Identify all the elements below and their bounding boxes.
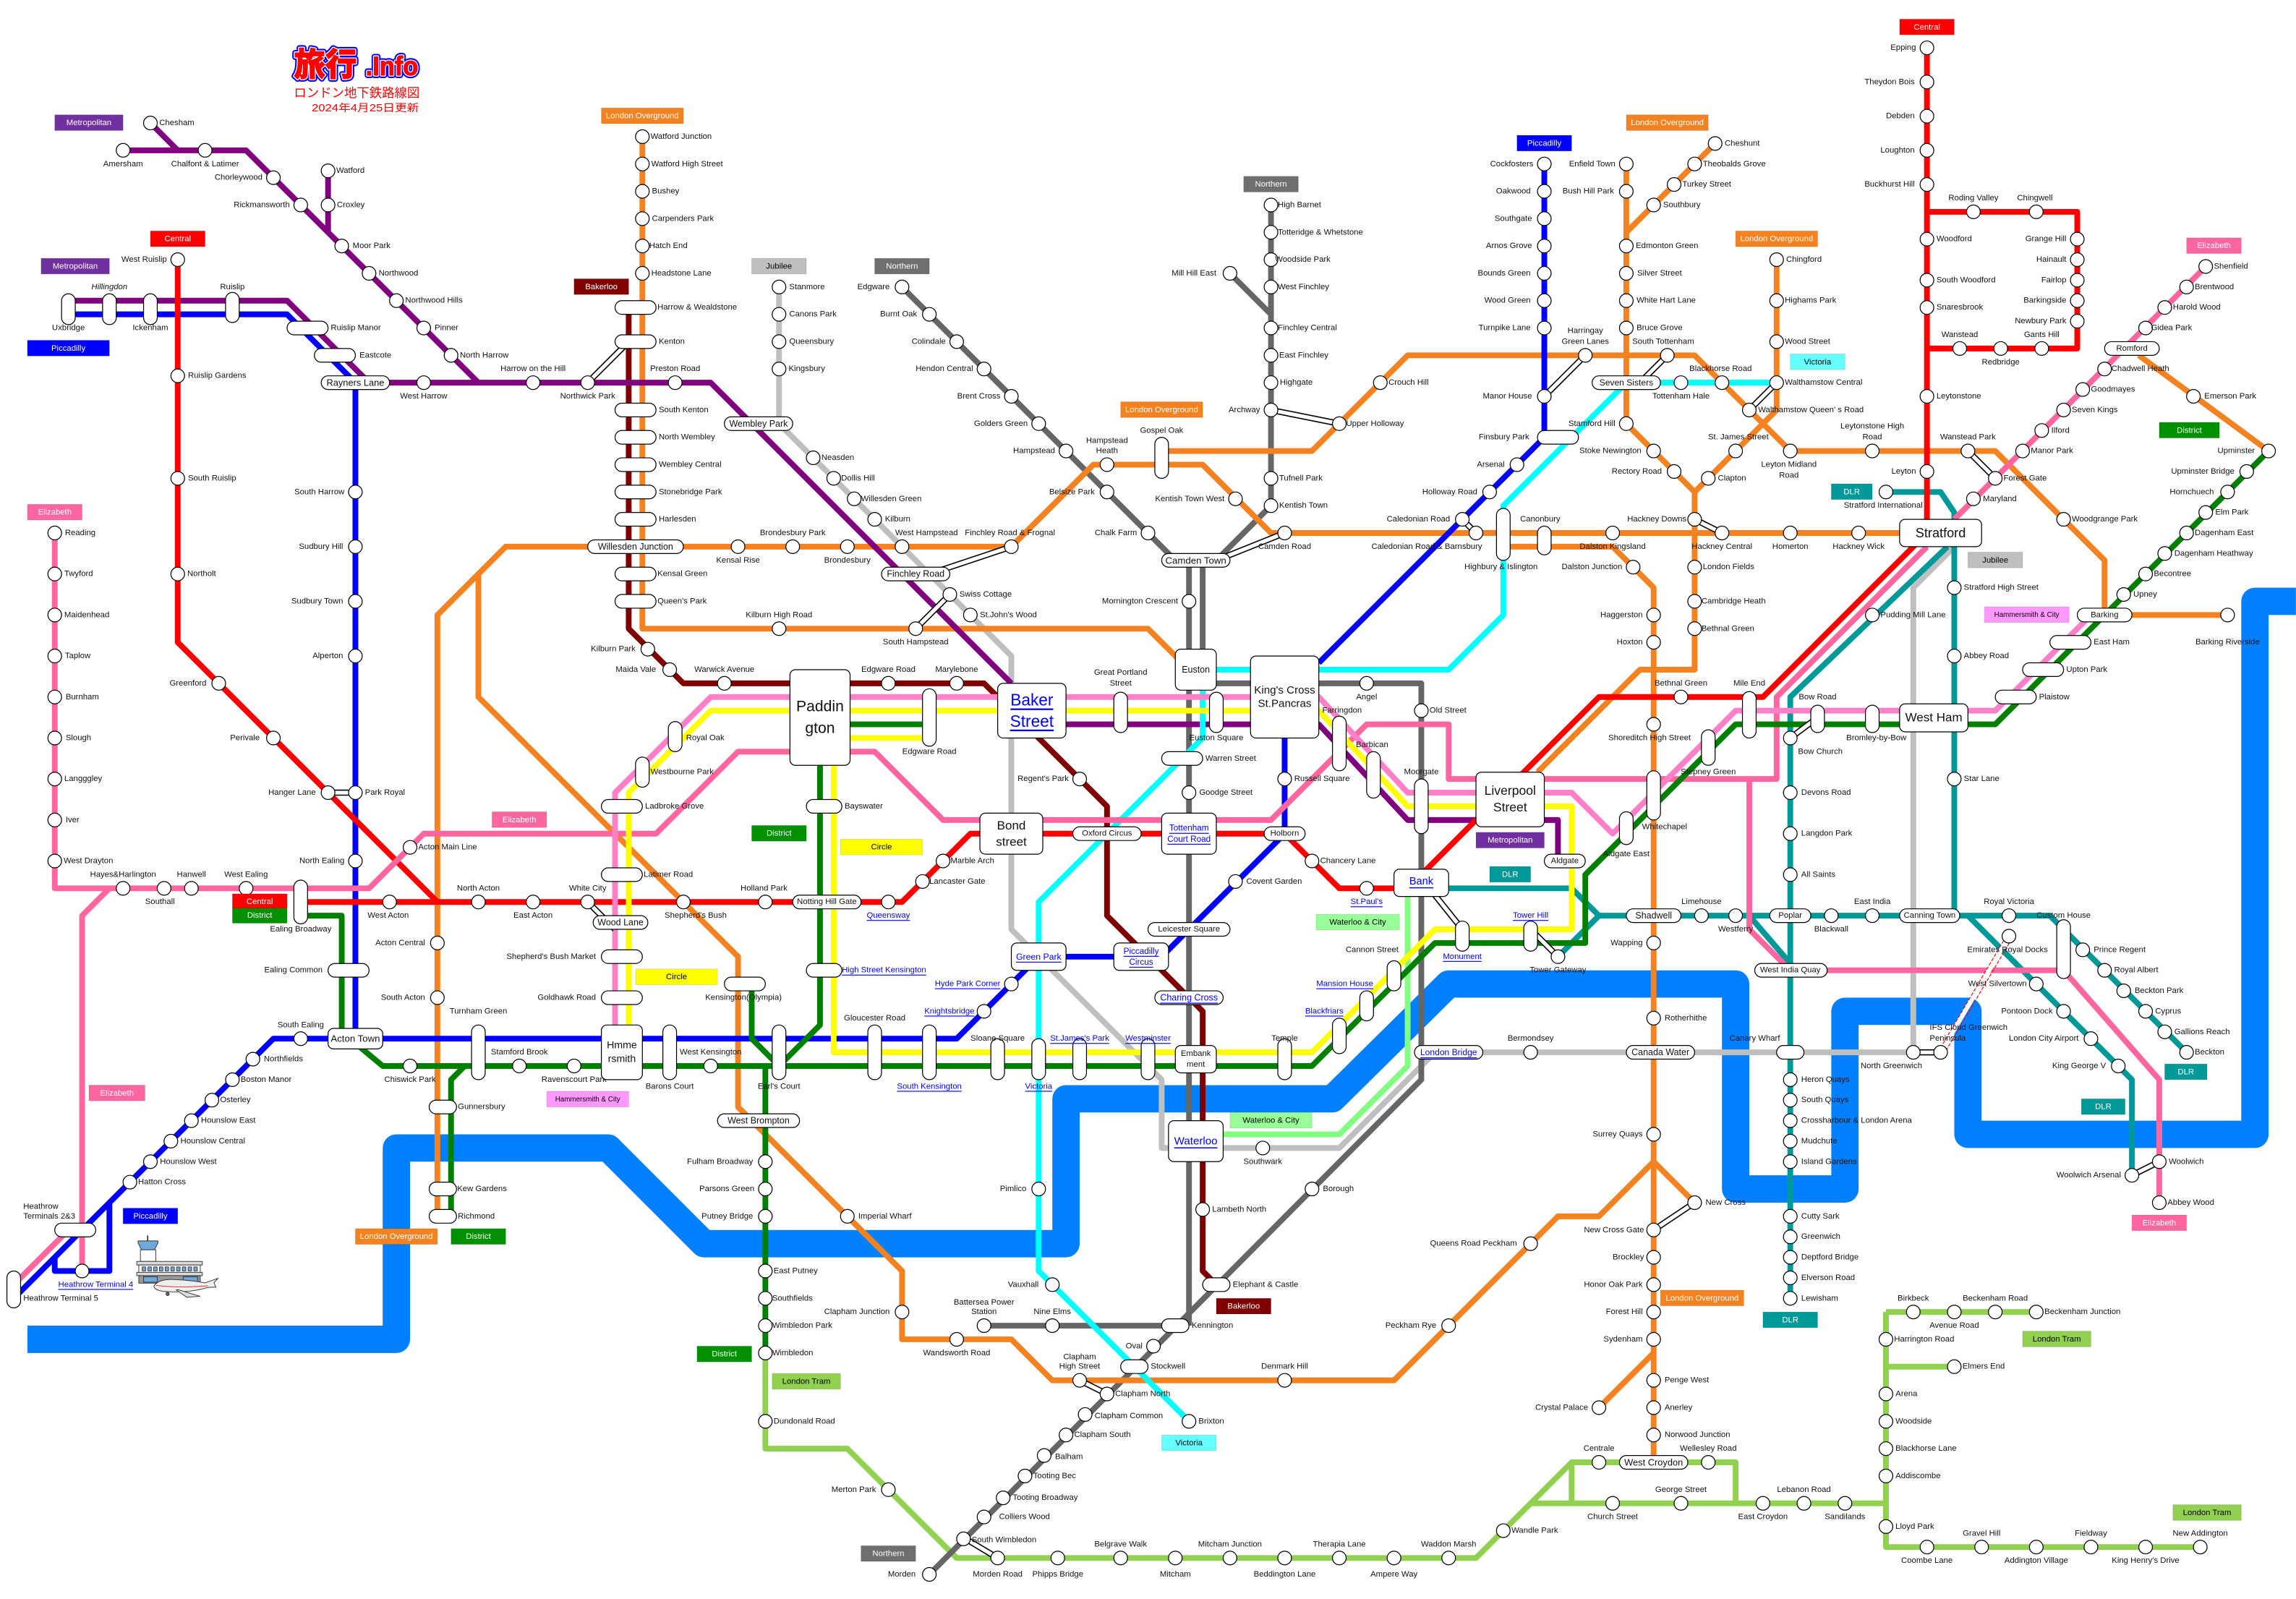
major interchange boxes [328,519,1981,1161]
box: King's Cross St Pancras [1250,656,1319,738]
badge: London Overground 4 [1736,231,1817,247]
box: Paddington: gton [805,720,835,737]
river Thames [27,601,2296,1339]
route: Bakerloo [628,307,1216,1284]
badge: Waterloo and City 2 [1316,914,1399,930]
badge: Elizabeth 5 [2132,1215,2187,1231]
stations: Metropolitan north west [52,116,700,401]
logo: .Info [366,51,418,81]
route: Northern [902,205,1421,1574]
box: Bank [1394,869,1448,897]
box: Paddington: Paddin [796,698,844,715]
stations: District Wimbledon branch and Tram [687,1155,2228,1579]
route: London Tram [765,1312,2201,1558]
badge: London Overground 5 [355,1229,438,1245]
stations: Bakerloo and Watford line [588,130,1266,1216]
badge: DLR 2 [1490,866,1531,882]
badge: Central [150,231,205,247]
badge: Victoria 2 [1161,1435,1216,1451]
route: Victoria [1038,383,1777,1421]
badge: Victoria [1791,354,1845,370]
box: Stratford [1900,519,1981,547]
badge: DLR [1831,484,1872,500]
interchange walkways [328,341,2159,1558]
badge: Piccadilly [27,341,109,356]
logo: 旅行 [294,38,357,85]
badge: Circle [840,839,923,855]
box: Embankment [1175,1046,1216,1073]
box: West Ham [1900,704,1968,732]
badge: District 3 [451,1229,505,1245]
box: Waterloo [1169,1121,1223,1161]
badge: Waterloo and City [1230,1112,1312,1128]
route: Hammersmith and City [615,615,2091,1025]
badge: London Tram 3 [2173,1505,2241,1520]
logo: 旅行 [294,38,357,85]
stations: Elizabeth and District east [1966,260,2276,1209]
stations: Central west [121,253,1383,934]
logo: .Info [366,51,418,81]
badge: Piccadilly 3 [123,1208,178,1224]
title block [294,38,419,114]
badge: London Tram 2 [2023,1331,2091,1347]
badge: DLR 4 [2081,1099,2125,1114]
route: DLR [1448,492,2187,1298]
badge: Elizabeth 3 [492,812,547,827]
stations: Northern [858,198,1467,1581]
stations: Overground east [1561,137,2260,742]
badge: District [2159,422,2219,438]
box: Piccadilly Circus [1114,943,1169,971]
badge: Northern 3 [861,1545,916,1561]
stations: District and Circle south west [265,722,1548,1223]
badge: Jubilee [751,258,806,274]
badge: Central and District [232,894,287,924]
route: Circle [628,711,1571,1052]
badge: Northern [875,258,929,274]
stations: Elizabeth west [48,526,477,906]
route: Jubilee [779,287,1954,1148]
box: Liverpool Street [1476,772,1545,827]
badge: London Overground 3 [1626,115,1708,130]
box: Paddington [790,670,850,765]
route: Central [178,48,2078,902]
badge: London Tram [772,1373,840,1389]
stations: Overground north London [716,376,1885,647]
stations: Central east [1844,41,2084,510]
badge: Elizabeth 2 [2187,238,2241,254]
badge: Hammersmith and City [1984,607,2069,623]
box: Baker Street: Baker [1010,691,1054,709]
badge: Bakerloo [574,279,628,294]
route: London Overground [438,137,2269,1462]
badge: Central 2 [1900,19,1954,35]
route: Metropolitan [69,123,1558,861]
box: Baker Street: Street [1010,712,1054,730]
badge: DLR 5 [1763,1312,1817,1328]
badge: London Overground 6 [1660,1290,1744,1306]
route: Waterloo and City [1216,888,1408,1134]
logo: 旅行 [294,38,357,85]
badge: Circle 2 [636,969,717,985]
route: Elizabeth [17,266,2206,1282]
badge: Piccadilly 2 [1517,135,1571,151]
badge: District 4 [697,1346,751,1362]
box: Tottenham Court Road [1161,813,1216,854]
stations: Piccadilly [7,157,1579,1308]
badge: District 2 [751,825,806,841]
badge: London Overground 2 [1121,402,1203,417]
stations: Overground south [824,936,1746,1442]
badge: Metropolitan 3 [1476,832,1545,848]
box: Euston [1175,649,1216,690]
logo: .Info [366,51,418,81]
badge: Metropolitan 2 [41,258,109,274]
route: District [301,451,2269,1353]
box: Green Park [1012,943,1066,971]
badge: Hammersmith and City 2 [547,1091,628,1107]
stations: Jubilee north west [725,280,1282,1166]
badge: Elizabeth 4 [89,1085,145,1101]
box: Baker Street [998,683,1066,738]
icon: airport terminal and plane [137,1235,218,1297]
logo [294,38,418,85]
badge: DLR 3 [2164,1064,2207,1080]
stations: Circle and Hammersmith city centre [1094,668,1907,868]
badge: Bakerloo 2 [1216,1298,1271,1314]
stations: DLR [1414,581,2230,1305]
badge: Jubilee 2 [1968,552,2023,568]
badge: Northern 2 [1244,176,1298,192]
badge: Metropolitan [55,115,123,130]
cable car link [1938,936,2012,1055]
stations: Victoria south [1000,1182,1224,1428]
box: Hammersmith [602,1025,642,1080]
route: Piccadilly [20,164,1545,1293]
badge: Elizabeth [27,504,82,520]
badge: London Overground [602,108,683,124]
box: Acton Town [328,1028,383,1049]
box: Bond Street [980,813,1043,854]
